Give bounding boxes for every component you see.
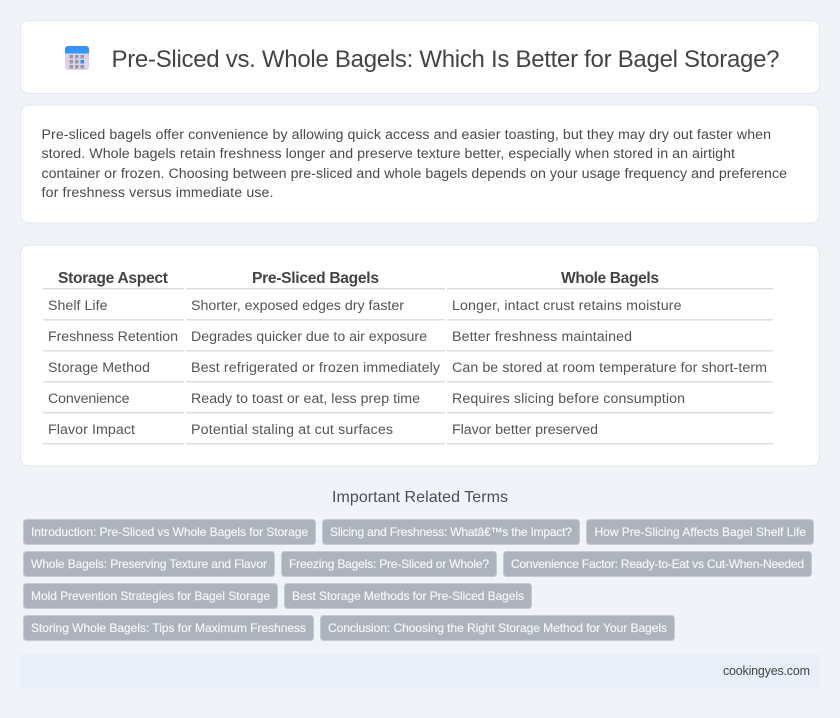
tag: shelf life	[586, 520, 814, 544]
panel: introduction	[20, 105, 820, 223]
table row: convenience: Ready to toast or eat, less prep time	[191, 391, 420, 407]
tag: storing whole bagels	[24, 616, 314, 640]
table row: flavor impact: Potential staling at cut surfaces	[191, 422, 393, 438]
table row: shelf life: Longer, intact crust retains moisture	[452, 298, 682, 314]
footer bar	[20, 654, 820, 688]
tag: whole bagels	[24, 552, 274, 576]
table row: storage method: Best refrigerated or frozen immediately	[191, 360, 441, 376]
tag: slicing and freshness	[322, 520, 580, 544]
tag: convenience factor	[504, 552, 812, 576]
table row: shelf life	[48, 298, 682, 314]
table row: shelf life: Shorter, exposed edges dry faster	[191, 298, 404, 314]
table row: convenience: Requires slicing before consumption	[452, 391, 685, 407]
icon: calendar	[65, 46, 89, 70]
tag: storing whole bagels: Storing Whole Bagels: Tips for Maximum Freshness	[31, 621, 306, 635]
tag: freezing	[282, 552, 496, 576]
table row: flavor impact: Flavor better preserved	[452, 422, 598, 438]
table row: storage method: Storage Method	[48, 360, 150, 376]
tag: shelf life: How Pre-Slicing Affects Bagel Shelf Life	[594, 525, 806, 539]
text block: introduction paragraph: for freshness versus immediate use.	[42, 185, 274, 201]
table row: freshness retention	[48, 329, 632, 345]
related term tags	[24, 520, 814, 640]
footer source: cookingyes.com	[723, 664, 810, 678]
table row: freshness retention: Degrades quicker due to air exposure	[191, 329, 427, 345]
table row: freshness retention: Freshness Retention	[48, 329, 178, 345]
table row: convenience: Convenience	[48, 391, 130, 407]
tag: introduction	[24, 520, 316, 544]
tag: best storage methods	[284, 584, 532, 608]
table row: flavor impact	[48, 422, 598, 438]
panel: comparison table	[20, 245, 820, 466]
heading: important related terms: Important Related Terms	[332, 489, 508, 506]
table row: convenience	[48, 391, 685, 407]
table row: shelf life: Shelf Life	[48, 298, 108, 314]
tag: slicing and freshness: Slicing and Freshness: Whatâ€™s the Impact?	[330, 525, 572, 539]
text block: introduction paragraph: stored. Whole bagels retain freshness longer and preserve texture better, especially when stored in an airtight	[42, 146, 735, 162]
table row: flavor impact: Flavor Impact	[48, 422, 135, 438]
text block: introduction paragraph: Pre-sliced bagels offer convenience by allowing quick access and easier toasting, but they may dry out faster when	[42, 127, 771, 143]
tag: introduction: Introduction: Pre-Sliced vs Whole Bagels for Storage	[31, 525, 308, 539]
text block: introduction paragraph	[42, 127, 787, 201]
tag: best storage methods: Best Storage Methods for Pre-Sliced Bagels	[292, 589, 524, 603]
tag: conclusion	[320, 616, 674, 640]
table row: freshness retention: Better freshness maintained	[452, 329, 632, 345]
table header row: Whole Bagels	[561, 270, 659, 287]
tag: whole bagels: Whole Bagels: Preserving Texture and Flavor	[31, 557, 267, 571]
text block: introduction paragraph: container or frozen. Choosing between pre-sliced and whole bagels depends on your usage frequency and preference	[42, 166, 787, 182]
tag: mold prevention	[24, 584, 278, 608]
table header row	[58, 270, 659, 287]
panel: header	[20, 20, 820, 94]
title: Pre-Sliced vs. Whole Bagels: Which Is Better for Bagel Storage?	[112, 46, 780, 73]
tag: conclusion: Conclusion: Choosing the Right Storage Method for Your Bagels	[328, 621, 667, 635]
tag: mold prevention: Mold Prevention Strategies for Bagel Storage	[31, 589, 270, 603]
table header row: Pre-Sliced Bagels	[252, 270, 379, 287]
table row: storage method	[48, 360, 767, 376]
table header row: Storage Aspect	[58, 270, 168, 287]
tag: freezing: Freezing Bagels: Pre-Sliced or Whole?	[289, 557, 489, 571]
table row: storage method: Can be stored at room temperature for short-term	[452, 360, 767, 376]
tag: convenience factor: Convenience Factor: Ready-to-Eat vs Cut-When-Needed	[511, 557, 804, 571]
